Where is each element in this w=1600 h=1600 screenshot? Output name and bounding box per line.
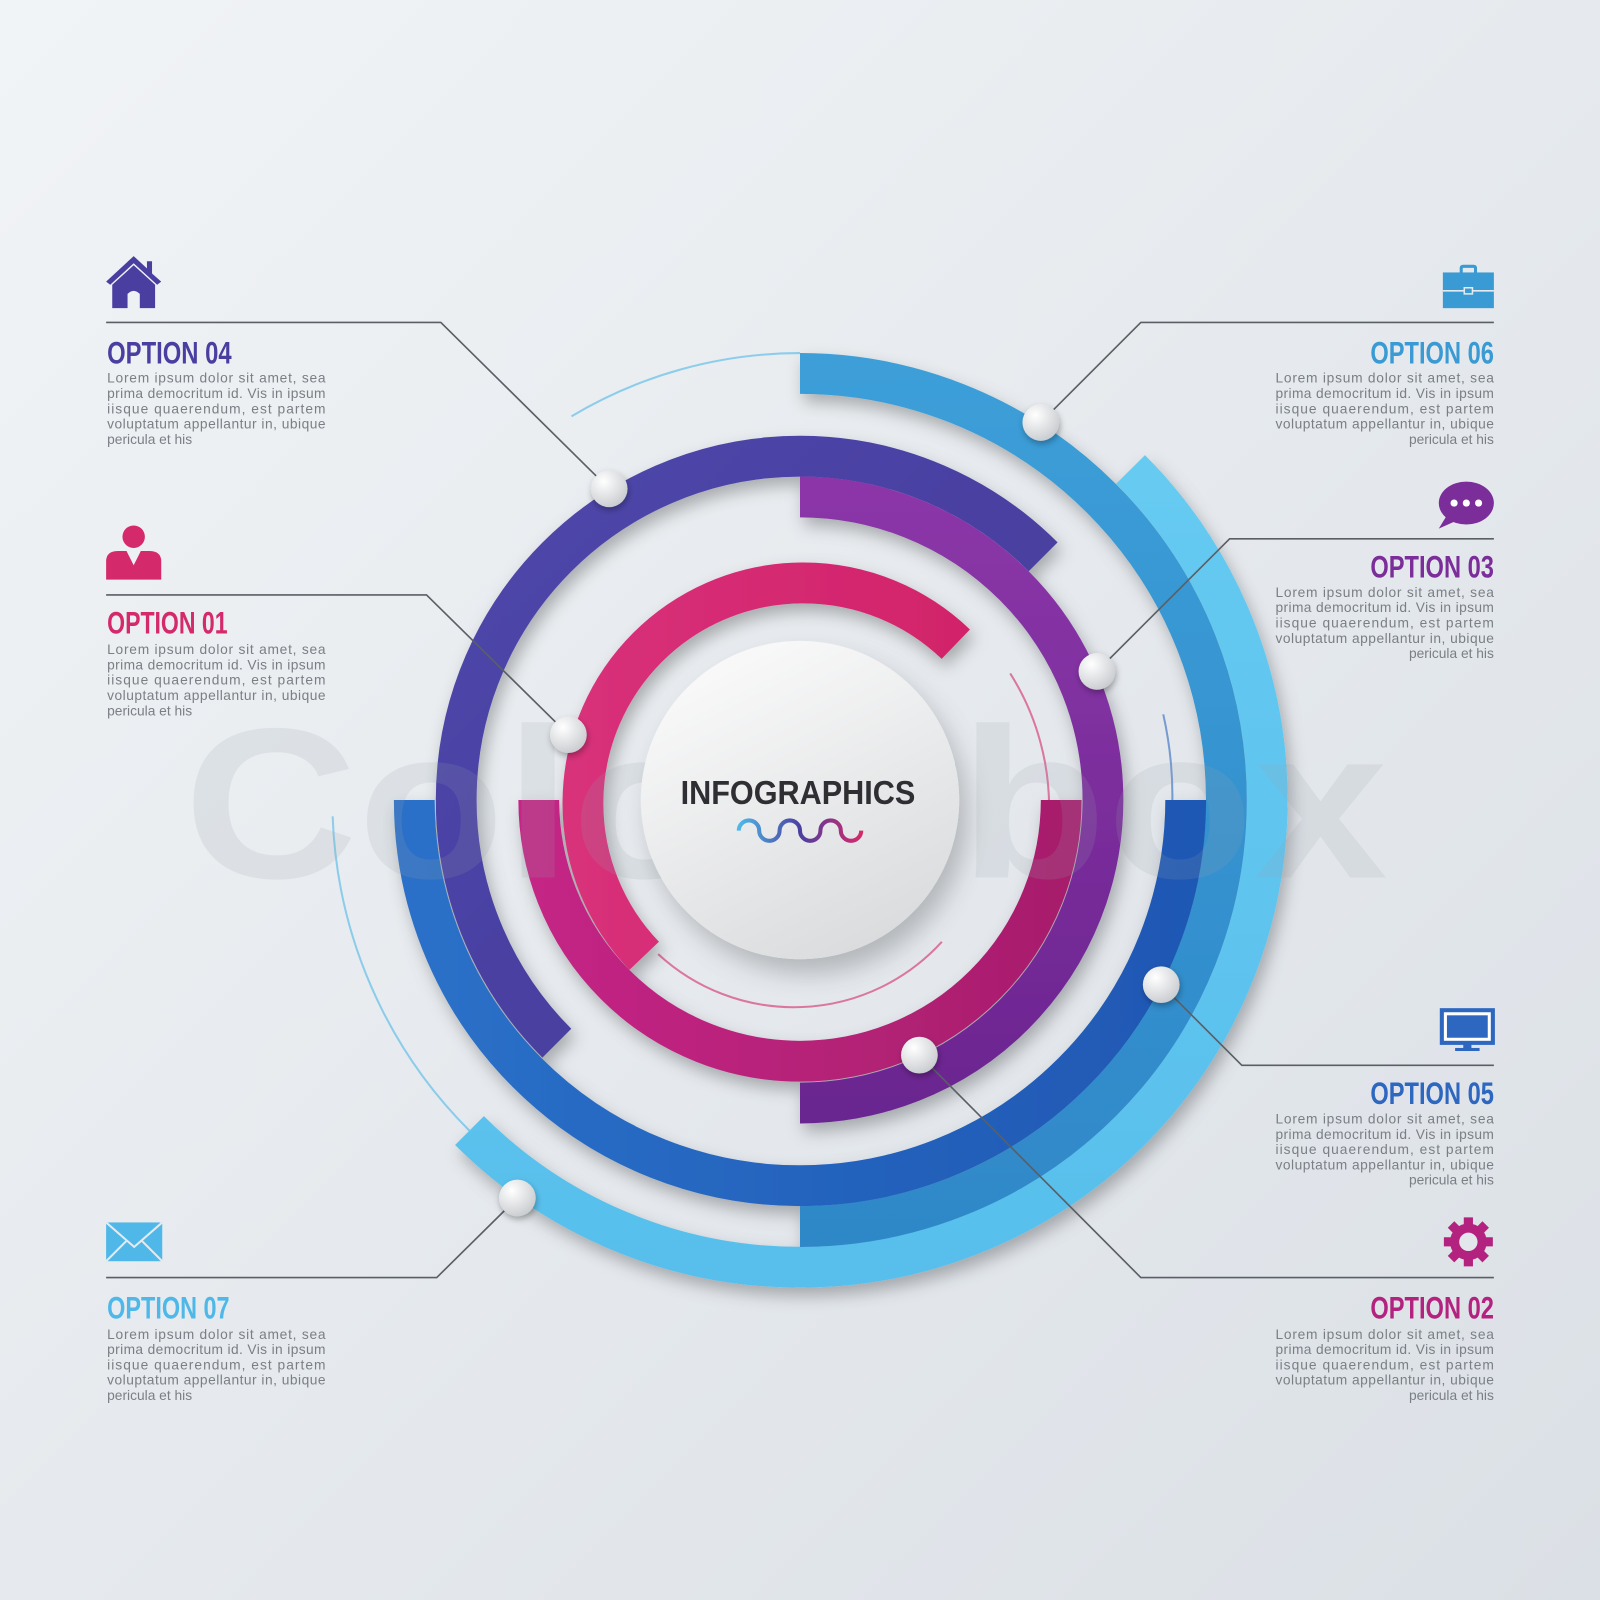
option 02 text: Lorem ipsum dolor sit amet, sea (1276, 1327, 1494, 1342)
option 05 text: voluptatum appellantur in, ubique (1276, 1157, 1494, 1172)
icon: monitor (1442, 1010, 1493, 1051)
option 02 text: iisque quaerendum, est partem (1276, 1357, 1494, 1372)
option 07 text: OPTION 07 (107, 1289, 230, 1325)
option 03 text: prima democritum id. Vis in ipsum (1276, 600, 1494, 615)
option 01 text: prima democritum id. Vis in ipsum (107, 657, 326, 672)
option 04 text: OPTION 04 (107, 334, 232, 370)
option 04 text: prima democritum id. Vis in ipsum (107, 386, 326, 401)
leader lines (106, 322, 1494, 1278)
option 05 text: iisque quaerendum, est partem (1276, 1142, 1494, 1157)
option 02 text: voluptatum appellantur in, ubique (1276, 1373, 1494, 1388)
option 07 text: pericula et his (107, 1388, 192, 1403)
option 03 text: pericula et his (1409, 646, 1494, 661)
option 04 text: voluptatum appellantur in, ubique (107, 417, 326, 432)
option 05 text: pericula et his (1409, 1173, 1494, 1188)
option 06 text: iisque quaerendum, est partem (1276, 401, 1494, 416)
icon: briefcase (1443, 266, 1494, 308)
option 04 text: Lorem ipsum dolor sit amet, sea (107, 371, 326, 386)
ring: option 05 (414, 800, 1186, 1186)
option 06 text: Lorem ipsum dolor sit amet, sea (1276, 371, 1494, 386)
option 06 text (1276, 334, 1494, 447)
ring: option 07 (469, 469, 1267, 1267)
ring: option 04 (456, 456, 1043, 1043)
option 03 text: Lorem ipsum dolor sit amet, sea (1276, 585, 1494, 600)
option 06 text: voluptatum appellantur in, ubique (1276, 417, 1494, 432)
option 05 text: OPTION 05 (1370, 1075, 1494, 1111)
center circle (641, 641, 959, 959)
option 01 text: OPTION 01 (107, 605, 228, 641)
chart: concentric option rings (414, 373, 1267, 1267)
option 02 text: prima democritum id. Vis in ipsum (1276, 1342, 1494, 1357)
icon: envelope (106, 1222, 162, 1261)
option 03 text: OPTION 03 (1370, 549, 1494, 585)
ring: option 01 (583, 583, 956, 956)
option 04 text: iisque quaerendum, est partem (107, 401, 326, 416)
option 07 text: iisque quaerendum, est partem (107, 1357, 326, 1372)
icon: house (106, 256, 161, 308)
option 06 text: prima democritum id. Vis in ipsum (1276, 386, 1494, 401)
option 04 text (107, 334, 326, 447)
option 01 text: iisque quaerendum, est partem (107, 673, 326, 688)
watermark: Colourbox (184, 685, 1388, 924)
ring: option 03 (800, 497, 1103, 1103)
option 07 text: Lorem ipsum dolor sit amet, sea (107, 1327, 326, 1342)
option 01 text: voluptatum appellantur in, ubique (107, 688, 326, 703)
option 05 text: prima democritum id. Vis in ipsum (1276, 1127, 1494, 1142)
wave decoration (739, 820, 861, 841)
option 01 text: pericula et his (107, 703, 192, 718)
ring: option 02 (539, 800, 1061, 1061)
option 06 text: OPTION 06 (1370, 334, 1494, 370)
option 07 text (107, 1289, 326, 1403)
ring: option 06 (800, 373, 1226, 1227)
icon: gear (1444, 1217, 1493, 1266)
option 07 text: prima democritum id. Vis in ipsum (107, 1342, 326, 1357)
center title: INFOGRAPHICS (681, 775, 915, 812)
option 01 text (107, 605, 326, 718)
marker dots (499, 404, 1180, 1216)
option 06 text: pericula et his (1409, 432, 1494, 447)
option 04 text: pericula et his (107, 432, 192, 447)
option 02 text: OPTION 02 (1370, 1289, 1494, 1325)
option 03 text: voluptatum appellantur in, ubique (1276, 631, 1494, 646)
option 05 text (1276, 1075, 1494, 1188)
option 02 text (1276, 1289, 1494, 1403)
option 01 text: Lorem ipsum dolor sit amet, sea (107, 642, 326, 657)
option 07 text: voluptatum appellantur in, ubique (107, 1373, 326, 1388)
option 03 text (1276, 549, 1494, 661)
option 05 text: Lorem ipsum dolor sit amet, sea (1276, 1111, 1494, 1126)
icon: person (106, 526, 161, 580)
icon: chat bubble (1439, 482, 1494, 529)
decorative thin arcs (333, 353, 1172, 1131)
option 03 text: iisque quaerendum, est partem (1276, 616, 1494, 631)
option 02 text: pericula et his (1409, 1388, 1494, 1403)
